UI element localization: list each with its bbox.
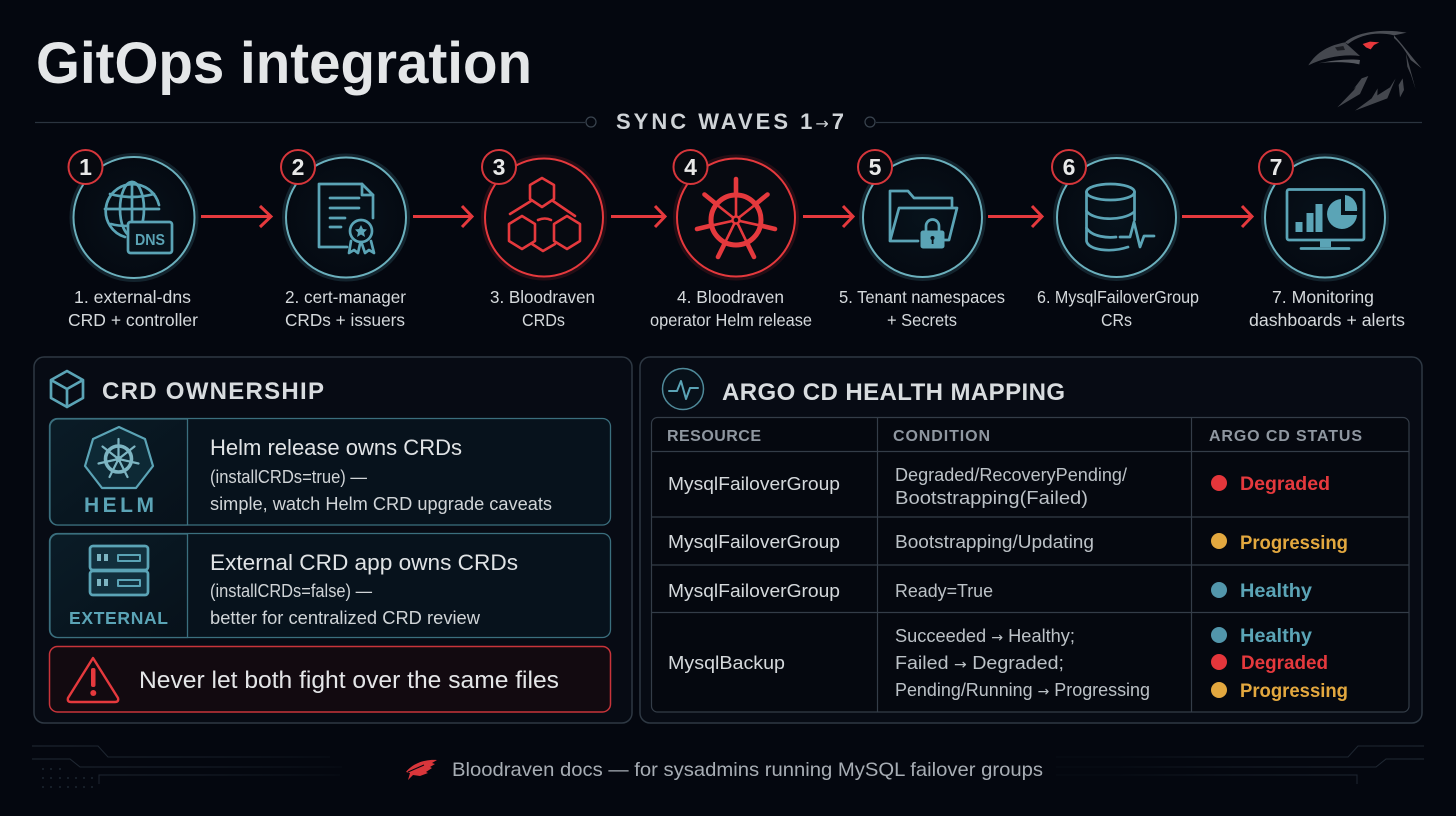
icon: hexagons bbox=[509, 178, 580, 251]
arrow 5 to 6 bbox=[988, 206, 1042, 227]
table header: CONDITION bbox=[893, 428, 990, 445]
label 1 bbox=[68, 287, 198, 330]
label 2: 2. cert-manager bbox=[285, 287, 406, 307]
text: External CRD app: better for centralized CRD review bbox=[210, 608, 481, 628]
label 5 bbox=[839, 287, 1005, 330]
badge 5 bbox=[858, 150, 892, 184]
badge 2: 2 bbox=[292, 154, 304, 180]
label 3: 3. Bloodraven bbox=[490, 287, 595, 307]
arrow 6 to 7 bbox=[1182, 206, 1252, 227]
badge 1 bbox=[68, 150, 102, 184]
table header bbox=[667, 428, 1362, 445]
step 4: Bloodraven operator bbox=[650, 150, 812, 330]
text: Helm release owns CRDs: simple, watch Helm CRD upgrade caveats bbox=[210, 494, 552, 514]
row: progressing bbox=[668, 531, 1348, 554]
icon: globe with DNS box bbox=[105, 182, 172, 253]
step 3: Bloodraven CRDs bbox=[482, 150, 604, 330]
badge 2 bbox=[281, 150, 315, 184]
row: degraded bbox=[668, 465, 1330, 508]
step 5: Tenant namespaces bbox=[839, 150, 1005, 330]
text: Helm release owns CRDs: (installCRDs=true) — bbox=[210, 467, 367, 487]
badge 6 bbox=[1052, 150, 1086, 184]
row: healthy: MysqlFailoverGroup bbox=[668, 580, 840, 601]
section divider: sync waves bbox=[35, 109, 1422, 134]
row: MysqlBackup: Failed → Degraded; bbox=[895, 653, 1064, 673]
row: MysqlBackup: Degraded bbox=[1241, 653, 1328, 674]
row: healthy: Healthy bbox=[1240, 581, 1312, 602]
label 7: dashboards + alerts bbox=[1249, 310, 1405, 330]
health table bbox=[652, 418, 1409, 712]
icon: warning triangle bbox=[68, 658, 118, 702]
label 6 bbox=[1037, 287, 1199, 330]
row: External owns CRDs bbox=[50, 534, 610, 638]
arrow 4 to 5 bbox=[803, 206, 853, 227]
text: Helm release owns CRDs bbox=[210, 435, 552, 514]
label 6: 6. MysqlFailoverGroup bbox=[1037, 287, 1199, 307]
section divider: sync waves: SYNC WAVES 1→7 bbox=[616, 109, 844, 134]
row: progressing: MysqlFailoverGroup bbox=[668, 531, 840, 552]
step 7: Monitoring bbox=[1249, 150, 1405, 330]
row: degraded: MysqlFailoverGroup bbox=[668, 473, 840, 494]
panel heading: CRD OWNERSHIP bbox=[102, 378, 324, 405]
icon: globe with DNS box: DNS bbox=[135, 232, 165, 249]
arrow 2 to 3 bbox=[413, 206, 472, 227]
label 4: operator Helm release bbox=[650, 310, 812, 330]
badge 3 bbox=[482, 150, 516, 184]
badge 7: 7 bbox=[1270, 154, 1282, 180]
badge 6: 6 bbox=[1063, 154, 1075, 180]
row: healthy: Ready=True bbox=[895, 581, 993, 601]
panel: Argo CD health mapping bbox=[640, 357, 1422, 723]
row: progressing: Progressing bbox=[1240, 533, 1348, 554]
label 5: 5. Tenant namespaces bbox=[839, 287, 1005, 307]
title: GitOps integration bbox=[36, 31, 532, 96]
icon: raven logo bbox=[1308, 31, 1422, 111]
icon: cube bbox=[51, 371, 83, 407]
icon: database with pulse bbox=[1086, 184, 1154, 250]
row: degraded: Degraded/RecoveryPending/ bbox=[895, 465, 1127, 485]
icon: pulse circle bbox=[662, 368, 704, 410]
text: External CRD app bbox=[210, 550, 518, 628]
icon: monitor dashboard bbox=[1287, 190, 1364, 248]
arrow 1 to 2 bbox=[201, 206, 271, 227]
row: MysqlBackup bbox=[668, 626, 1348, 702]
step 6: MysqlFailoverGroup CRs bbox=[1037, 150, 1199, 330]
row: progressing: Bootstrapping/Updating bbox=[895, 532, 1094, 552]
row: degraded: Bootstrapping(Failed) bbox=[895, 488, 1088, 508]
icon label: HELM: HELM bbox=[84, 494, 154, 517]
label 2 bbox=[285, 287, 406, 330]
icon label: EXTERNAL: EXTERNAL bbox=[69, 608, 168, 628]
step 2: cert-manager bbox=[281, 150, 408, 330]
badge 4: 4 bbox=[684, 154, 697, 180]
row: MysqlBackup: Healthy bbox=[1240, 626, 1312, 647]
icon: folder with lock bbox=[890, 191, 957, 248]
label 7: 7. Monitoring bbox=[1272, 287, 1374, 307]
badge 1: 1 bbox=[79, 154, 92, 180]
row: MysqlBackup: Pending/Running → Progressing bbox=[895, 680, 1150, 700]
table header: RESOURCE bbox=[667, 428, 761, 445]
row: MysqlBackup: Succeeded → Healthy; bbox=[895, 626, 1075, 646]
row: MysqlBackup: Progressing bbox=[1240, 681, 1348, 702]
row: MysqlBackup: MysqlBackup bbox=[668, 652, 785, 673]
row: Helm owns CRDs bbox=[50, 418, 610, 525]
badge 5: 5 bbox=[869, 154, 882, 180]
label 5: + Secrets bbox=[887, 310, 957, 330]
icon: helm wheel bbox=[697, 179, 775, 257]
icon: certificate bbox=[319, 184, 374, 253]
label 3 bbox=[490, 287, 595, 330]
row: degraded: Degraded bbox=[1240, 474, 1330, 495]
panel: CRD ownership bbox=[34, 357, 632, 723]
badge 7 bbox=[1259, 150, 1293, 184]
callout: warning bbox=[50, 646, 610, 712]
footer text: Bloodraven docs — for sysadmins running MySQL failover groups bbox=[452, 759, 1043, 781]
icon: helm heptagon bbox=[85, 427, 153, 488]
label 3: CRDs bbox=[522, 310, 565, 330]
step 1: external-dns bbox=[68, 150, 198, 330]
label 4 bbox=[650, 287, 812, 330]
row: healthy bbox=[668, 580, 1312, 602]
label 1: CRD + controller bbox=[68, 310, 198, 330]
label 1: 1. external-dns bbox=[74, 287, 191, 307]
text: External CRD app: (installCRDs=false) — bbox=[210, 581, 372, 601]
badge 3: 3 bbox=[493, 154, 505, 180]
text: External CRD app: External CRD app owns CRDs bbox=[210, 550, 518, 575]
label 6: CRs bbox=[1101, 310, 1132, 330]
panel heading: ARGO CD HEALTH MAPPING bbox=[722, 379, 1065, 406]
text: Helm release owns CRDs: Helm release owns CRDs bbox=[210, 435, 462, 460]
arrow 3 to 4 bbox=[611, 206, 665, 227]
label 2: CRDs + issuers bbox=[285, 310, 405, 330]
label 4: 4. Bloodraven bbox=[677, 287, 784, 307]
footer: feather icon bbox=[406, 760, 437, 780]
icon: server rack bbox=[90, 546, 148, 595]
warning text: Never let both fight over the same files bbox=[139, 667, 559, 694]
table header: ARGO CD STATUS bbox=[1209, 428, 1362, 445]
label 7 bbox=[1249, 287, 1405, 330]
badge 4 bbox=[674, 150, 708, 184]
